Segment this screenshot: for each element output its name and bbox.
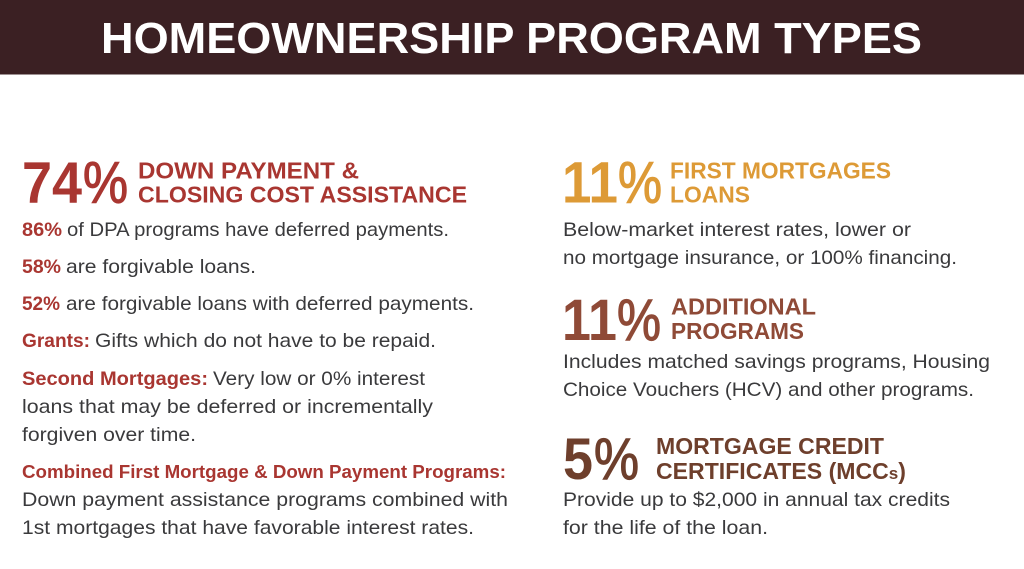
heading: 11% additional programs: PROGRAMS bbox=[671, 318, 804, 344]
heading: 11% first mortgages: 11 bbox=[562, 150, 618, 216]
heading: 74% down payment: % bbox=[83, 150, 128, 216]
heading: 74% down payment: CLOSING COST ASSISTANCE bbox=[138, 182, 467, 208]
heading: 11% first mortgages bbox=[562, 150, 891, 216]
heading: 5% mortgage credit certificates: CERTIFICATES (MCCs) bbox=[656, 458, 906, 484]
heading: 5% mortgage credit certificates: 5 bbox=[563, 427, 593, 492]
heading: 11% first mortgages: % bbox=[618, 150, 662, 216]
stat: 58% forgivable: 58% bbox=[22, 256, 61, 278]
stat: 86% deferred: 86% bbox=[22, 219, 62, 241]
heading: 5% mortgage credit certificates: MORTGAGE CREDIT bbox=[656, 433, 884, 459]
text: credit certificates description: for the life of the loan. bbox=[563, 517, 768, 539]
header banner bbox=[0, 0, 1024, 74]
text: additional programs description: Choice Vouchers (HCV) and other programs. bbox=[563, 379, 974, 401]
panel: mortgage credit certificates bbox=[563, 427, 950, 539]
text: second mortgages: Second Mortgages: bbox=[22, 368, 208, 390]
text: additional programs description bbox=[563, 351, 990, 401]
text: credit certificates description: Provide up to $2,000 in annual tax credits bbox=[563, 489, 950, 511]
text: grants: Grants: bbox=[22, 330, 90, 352]
heading: 11% additional programs: % bbox=[617, 288, 661, 353]
text: grants: Gifts which do not have to be repaid. bbox=[95, 330, 436, 352]
text: second mortgages: Very low or 0% interest bbox=[213, 368, 426, 390]
stat: 86% deferred: of DPA programs have deferred payments. bbox=[67, 219, 449, 241]
stat: 52% forgivable deferred: 52% bbox=[22, 293, 60, 315]
text: combined programs: Combined First Mortgage & Down Payment Programs: bbox=[22, 461, 506, 482]
heading: 74% down payment: 74 bbox=[22, 150, 82, 216]
heading: 11% additional programs bbox=[562, 288, 816, 353]
text: first mortgages description: no mortgage insurance, or 100% financing. bbox=[563, 247, 957, 269]
text: second mortgages bbox=[22, 368, 433, 446]
panel: additional programs bbox=[562, 288, 990, 401]
text: combined programs bbox=[22, 461, 508, 539]
heading: 11% first mortgages: FIRST MORTGAGES bbox=[670, 158, 891, 184]
text: credit certificates description bbox=[563, 489, 950, 539]
text: combined programs: Down payment assistance programs combined with bbox=[22, 489, 508, 511]
panel: first mortgage loans bbox=[562, 150, 957, 269]
heading: 5% mortgage credit certificates: % bbox=[594, 427, 639, 492]
heading: 11% first mortgages: LOANS bbox=[670, 182, 750, 208]
heading: 5% mortgage credit certificates bbox=[563, 427, 906, 492]
text: second mortgages: loans that may be deferred or incrementally bbox=[22, 396, 433, 418]
text: first mortgages description bbox=[563, 219, 957, 269]
title: HOMEOWNERSHIP PROGRAM TYPES bbox=[101, 14, 922, 63]
heading: 11% additional programs: 11 bbox=[562, 288, 617, 353]
stat: 58% forgivable: are forgivable loans. bbox=[66, 256, 256, 278]
heading: 11% additional programs: ADDITIONAL bbox=[671, 294, 816, 320]
panel: down payment and closing cost assistance bbox=[22, 150, 508, 539]
text: combined programs: 1st mortgages that have favorable interest rates. bbox=[22, 517, 474, 539]
text: second mortgages: forgiven over time. bbox=[22, 424, 196, 446]
stat: 52% forgivable deferred: are forgivable loans with deferred payments. bbox=[66, 293, 474, 315]
text: first mortgages description: Below-market interest rates, lower or bbox=[563, 219, 912, 241]
heading: 74% down payment: DOWN PAYMENT & bbox=[138, 158, 359, 184]
text: additional programs description: Includes matched savings programs, Housing bbox=[563, 351, 990, 373]
heading: 74% down payment bbox=[22, 150, 467, 216]
